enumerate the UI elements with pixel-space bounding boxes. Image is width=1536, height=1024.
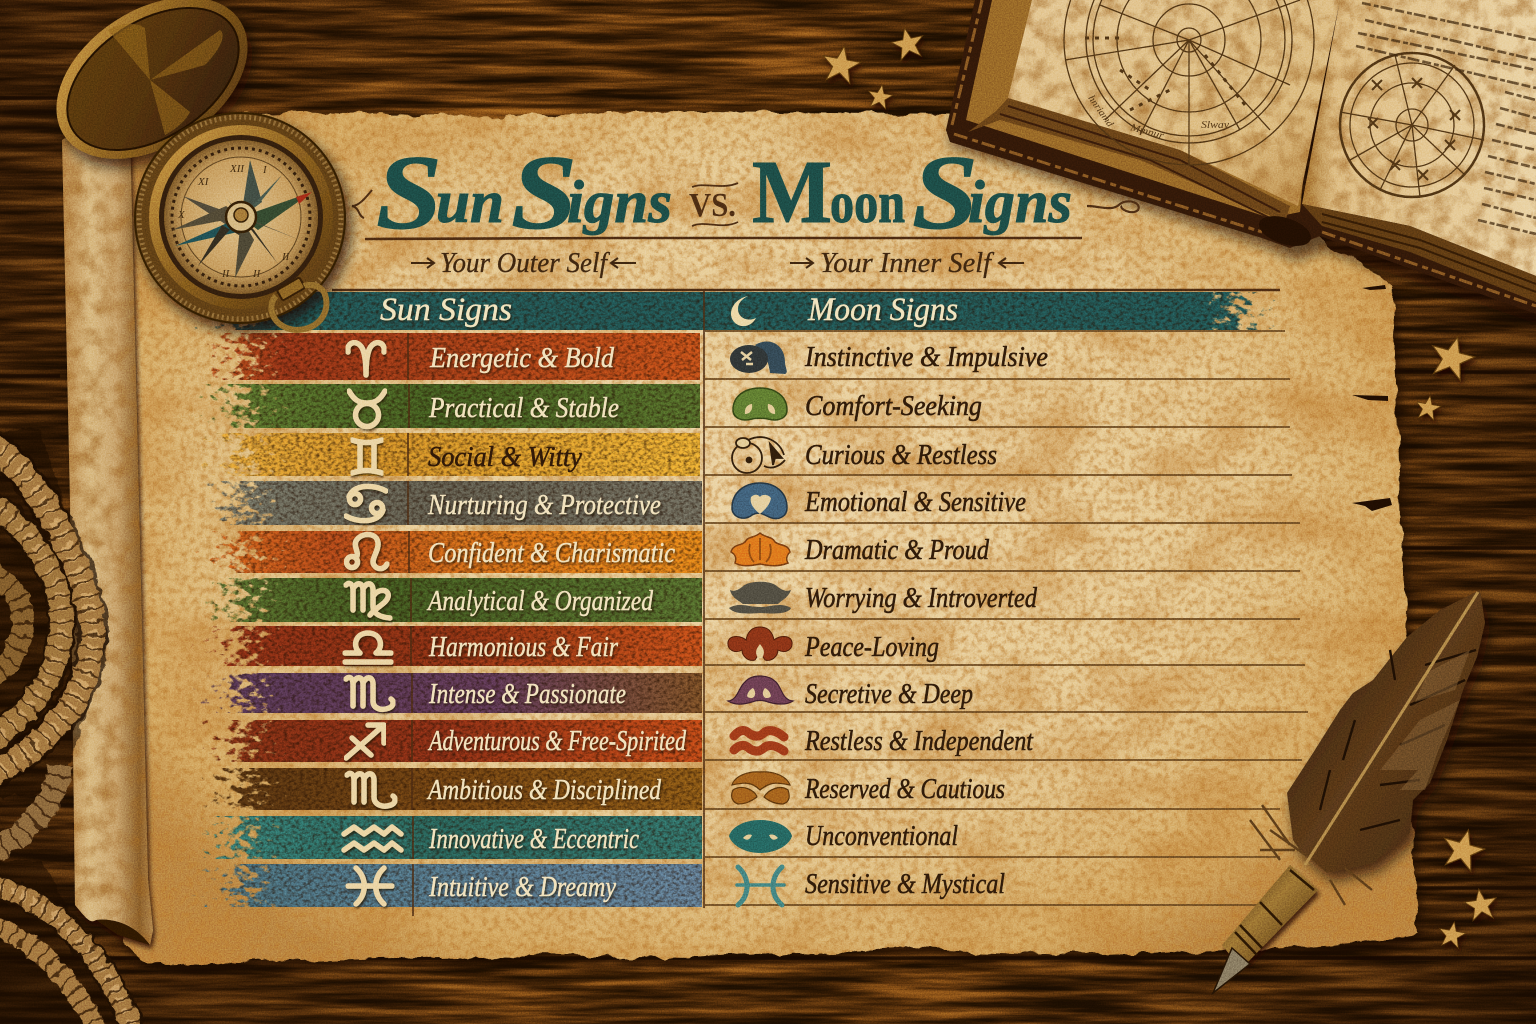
quill shaft <box>1305 592 1478 865</box>
cover wear strokes <box>952 0 1536 306</box>
icon: Peace-Loving <box>728 627 792 660</box>
compass numerals: II <box>252 268 262 280</box>
label: Emotional & Sensitive <box>804 487 1026 518</box>
left page <box>1008 0 1340 206</box>
row: Sagittarius <box>346 725 687 758</box>
label: Dramatic & Proud <box>804 535 990 566</box>
icon: Sagittarius <box>346 725 384 758</box>
label: Innovative & Eccentric <box>428 824 639 855</box>
row: Emotional <box>732 483 1026 519</box>
label: Secretive & Deep <box>805 679 973 710</box>
title: Sun Signs <box>376 134 672 251</box>
label: Harmonious & Fair <box>428 632 618 663</box>
label: Adventurous & Free-Spirited <box>427 726 687 757</box>
title group <box>352 134 1139 251</box>
right page <box>1302 0 1536 276</box>
title underline <box>365 238 1082 239</box>
icon: Reserved <box>732 772 790 804</box>
icon: Curious <box>732 437 785 473</box>
chart labels left <box>1086 93 1230 142</box>
icon: Libra <box>345 633 391 662</box>
open astrology book <box>946 0 1536 325</box>
row: Taurus <box>349 391 619 426</box>
title: VS.: VS. <box>689 187 736 224</box>
label: Peace-Loving <box>804 632 939 663</box>
row: Comfort <box>733 388 982 422</box>
icon: Dramatic <box>731 533 790 566</box>
title: Moon Signs: M <box>752 143 832 242</box>
row: Cancer <box>346 486 661 521</box>
pen barrel <box>1222 865 1318 965</box>
label: Confident & Charismatic <box>428 538 675 569</box>
subtitle: your inner self: Your Inner Self <box>820 247 995 279</box>
row: Reserved <box>732 772 1005 805</box>
chart labels left: Mmnur <box>1128 122 1165 142</box>
compass <box>27 0 345 330</box>
label: Sensitive & Mystical <box>805 869 1005 900</box>
compass numerals: II <box>281 251 291 263</box>
title: Sun Signs: S <box>511 134 577 251</box>
moon column rules <box>705 331 1308 905</box>
quill feather <box>1213 590 1485 993</box>
moon signs column <box>728 341 1048 905</box>
row: Sensitive <box>737 867 1005 905</box>
subtitle: your outer self: Your Outer Self <box>440 247 611 279</box>
parchment sheet <box>120 111 1418 966</box>
icon: Worrying <box>729 582 791 613</box>
compass numerals: XI <box>197 176 210 188</box>
row: Restless <box>734 726 1034 757</box>
icon: Leo <box>346 534 387 569</box>
compass numerals: XII <box>229 163 245 175</box>
compass star <box>172 160 312 278</box>
compass numerals: I <box>262 164 268 176</box>
compass numerals: X <box>177 209 186 221</box>
label: Instinctive & Impulsive <box>804 342 1048 373</box>
icon: Gemini <box>352 440 382 473</box>
label: Intuitive & Dreamy <box>428 872 616 903</box>
flourish left <box>352 190 372 218</box>
label: Comfort-Seeking <box>805 391 982 422</box>
label: Practical & Stable <box>428 393 619 424</box>
column dividers <box>408 290 704 916</box>
star chart right <box>1340 53 1484 197</box>
icon: Emotional <box>732 483 787 519</box>
icon: Pisces <box>348 868 392 904</box>
row: Unconventional <box>729 820 958 853</box>
row: Dramatic <box>731 533 990 566</box>
compass numerals: II <box>221 268 231 280</box>
label: Nurturing & Protective <box>427 490 661 521</box>
row: Capricorn <box>347 773 662 806</box>
stars <box>819 25 1499 949</box>
label: Energetic & Bold <box>429 343 615 374</box>
row: Worrying <box>729 582 1038 614</box>
left page edges <box>966 0 1320 218</box>
label: Intense & Passionate <box>428 679 626 710</box>
header: Sun Signs: Sun Signs <box>380 292 512 328</box>
icon: Aries <box>348 343 384 375</box>
row: Scorpio <box>346 677 626 710</box>
compass ring <box>271 277 326 330</box>
pen nib <box>1213 948 1250 993</box>
title: Sun Signs: S <box>376 134 442 251</box>
icon: crescent moon <box>731 296 756 326</box>
icon: Secretive <box>728 676 793 704</box>
header: Moon Signs: Moon Signs <box>807 292 958 328</box>
left page stack <box>968 98 1290 222</box>
star chart left <box>1064 0 1314 165</box>
label: Reserved & Cautious <box>804 774 1005 805</box>
sun signs column <box>344 343 687 904</box>
icon: Comfort <box>733 388 787 420</box>
compass case <box>135 113 345 323</box>
flourish right <box>1087 201 1139 212</box>
icon: Aquarius <box>344 827 401 850</box>
row: Leo <box>346 534 675 569</box>
label: Curious & Restless <box>805 440 997 471</box>
title: Moon Signs: S <box>912 134 978 251</box>
clasp <box>1255 210 1315 252</box>
row: Instinctive <box>730 341 1048 374</box>
label: Unconventional <box>805 821 958 852</box>
title: Sun Signs: un <box>436 169 504 235</box>
right page stack <box>1302 204 1536 302</box>
chart labels left: hnriamd <box>1086 93 1116 130</box>
icon: Scorpio <box>346 677 393 709</box>
icon: Capricorn <box>347 773 395 806</box>
parchment tears on right edge <box>1352 285 1392 511</box>
book cover <box>946 0 1536 314</box>
icon: Instinctive <box>730 341 787 374</box>
label: Restless & Independent <box>804 726 1034 757</box>
icon: Restless <box>734 730 784 751</box>
title: Sun Signs: igns <box>567 169 672 235</box>
rope coil <box>0 430 140 1024</box>
title: Moon Signs: oon <box>830 170 905 235</box>
scroll roll at left <box>62 129 153 945</box>
feather vane <box>1287 590 1485 873</box>
icon: Pisces moon <box>737 867 784 905</box>
compass hinge <box>168 124 208 150</box>
manuscript text lines <box>1356 3 1536 234</box>
row: Virgo <box>346 583 654 618</box>
icon: Unconventional <box>729 820 792 853</box>
row: Libra <box>345 632 618 663</box>
icon: Virgo <box>346 583 390 618</box>
compass hub <box>226 202 256 232</box>
label: Social & Witty <box>428 442 583 473</box>
header top rule <box>332 289 1280 291</box>
compass numerals <box>177 163 291 280</box>
header and colour bars <box>180 292 1300 907</box>
row: Curious <box>732 437 997 473</box>
label: Analytical & Organized <box>426 586 654 617</box>
feather barbs <box>1320 650 1476 830</box>
label: Ambitious & Disciplined <box>426 775 662 806</box>
row: Pisces <box>348 868 616 904</box>
label: Worrying & Introverted <box>805 583 1038 614</box>
icon: Cancer <box>346 486 386 521</box>
icon: Taurus <box>349 391 385 426</box>
row: Gemini <box>352 440 583 473</box>
compass lid <box>27 0 277 192</box>
title: Moon Signs <box>752 134 1072 251</box>
row: Aries <box>348 343 615 375</box>
row: Secretive <box>728 676 973 710</box>
row: Peace-Loving <box>728 627 939 663</box>
chart labels left: Slway <box>1201 120 1230 131</box>
title: Moon Signs: igns <box>968 169 1072 235</box>
row: Aquarius <box>344 824 639 855</box>
